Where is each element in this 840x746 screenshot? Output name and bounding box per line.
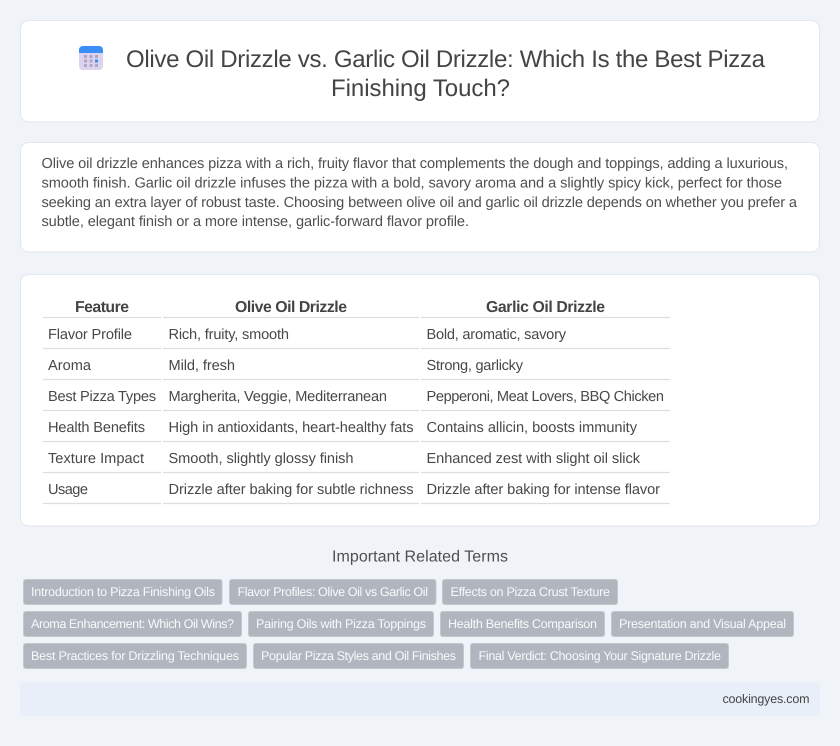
table row: texture impact: Texture Impact <box>48 451 144 467</box>
table header row <box>43 299 670 318</box>
table row: usage: Drizzle after baking for subtle richness <box>168 482 414 498</box>
table row: usage: Drizzle after baking for intense flavor <box>426 482 660 498</box>
table row: usage <box>43 482 670 504</box>
tag: final verdict <box>470 644 728 668</box>
table row: flavor profile: Bold, aromatic, savory <box>426 327 567 343</box>
table row: flavor profile: Flavor Profile <box>48 327 132 343</box>
panel: header <box>20 20 820 122</box>
table row: aroma: Strong, garlicky <box>426 358 524 374</box>
text block: description: smooth finish. Garlic oil drizzle infuses the pizza with a bold, savory aroma and a slightly spicy kick, perfect for those <box>42 176 782 192</box>
tag: crust texture: Effects on Pizza Crust Texture <box>450 585 610 599</box>
tag: aroma enhancement: Aroma Enhancement: Which Oil Wins? <box>31 617 234 631</box>
tag: presentation: Presentation and Visual Appeal <box>619 617 786 631</box>
table header row: Garlic Oil Drizzle <box>486 299 605 316</box>
tag: best practices: Best Practices for Drizzling Techniques <box>31 649 239 663</box>
tag: introduction: Introduction to Pizza Finishing Oils <box>31 585 215 599</box>
tag: popular styles <box>254 644 464 668</box>
table row: flavor profile <box>43 327 670 348</box>
text block: description: seeking an extra layer of robust taste. Choosing between olive oil and garlic oil drizzle depends on whether you prefer a <box>42 195 798 211</box>
icon: calendar <box>79 46 103 70</box>
table row: health benefits: High in antioxidants, heart-healthy fats <box>168 420 414 436</box>
table row: aroma: Aroma <box>48 358 92 374</box>
table row: usage: Usage <box>48 482 88 498</box>
tag: presentation <box>612 612 794 636</box>
panel: introduction text <box>20 142 820 252</box>
footer <box>20 682 820 716</box>
table header row: Feature <box>75 299 129 316</box>
table row: texture impact: Smooth, slightly glossy finish <box>168 451 354 467</box>
tag: final verdict: Final Verdict: Choosing Your Signature Drizzle <box>478 649 721 663</box>
title: Finishing Touch? <box>331 75 510 102</box>
table row: flavor profile: Rich, fruity, smooth <box>168 327 289 343</box>
title <box>126 46 766 102</box>
tag: aroma enhancement <box>24 612 242 636</box>
table row: texture impact: Enhanced zest with slight oil slick <box>426 451 641 467</box>
tag: introduction <box>24 580 222 604</box>
tag: crust texture <box>442 580 618 604</box>
table row: best pizza types <box>43 389 670 410</box>
text block: description <box>42 156 798 230</box>
tag: health benefits: Health Benefits Comparison <box>448 617 597 631</box>
title: Olive Oil Drizzle vs. Garlic Oil Drizzle: Which Is the Best Pizza <box>126 46 766 73</box>
tag: best practices <box>24 644 246 668</box>
text block: description: subtle, elegant finish or a more intense, garlic-forward flavor profile. <box>42 214 469 230</box>
tag: popular styles: Popular Pizza Styles and Oil Finishes <box>261 649 456 663</box>
tag: pairing oils <box>248 612 434 636</box>
heading: important related terms: Important Related Terms <box>332 548 508 566</box>
table row: best pizza types: Pepperoni, Meat Lovers, BBQ Chicken <box>426 389 664 405</box>
table header row: Olive Oil Drizzle <box>235 299 347 316</box>
table row: health benefits: Contains allicin, boosts immunity <box>426 420 638 436</box>
tag: flavor profiles <box>230 580 436 604</box>
table row: health benefits: Health Benefits <box>48 420 145 436</box>
related term tags <box>24 580 794 668</box>
text block: description: Olive oil drizzle enhances pizza with a rich, fruity flavor that complements the dough and toppings, adding a luxurious, <box>42 156 788 172</box>
tag: flavor profiles: Flavor Profiles: Olive Oil vs Garlic Oil <box>238 585 428 599</box>
table row: health benefits <box>43 420 670 442</box>
footer: cookingyes.com <box>722 692 810 706</box>
table row: aroma: Mild, fresh <box>168 358 235 374</box>
table row: aroma <box>43 358 670 380</box>
panel: comparison table <box>20 274 820 526</box>
table row: best pizza types: Best Pizza Types <box>48 389 156 405</box>
table row: texture impact <box>43 451 670 472</box>
tag: health benefits <box>440 612 604 636</box>
table row: best pizza types: Margherita, Veggie, Mediterranean <box>168 389 387 405</box>
tag: pairing oils: Pairing Oils with Pizza Toppings <box>256 617 426 631</box>
